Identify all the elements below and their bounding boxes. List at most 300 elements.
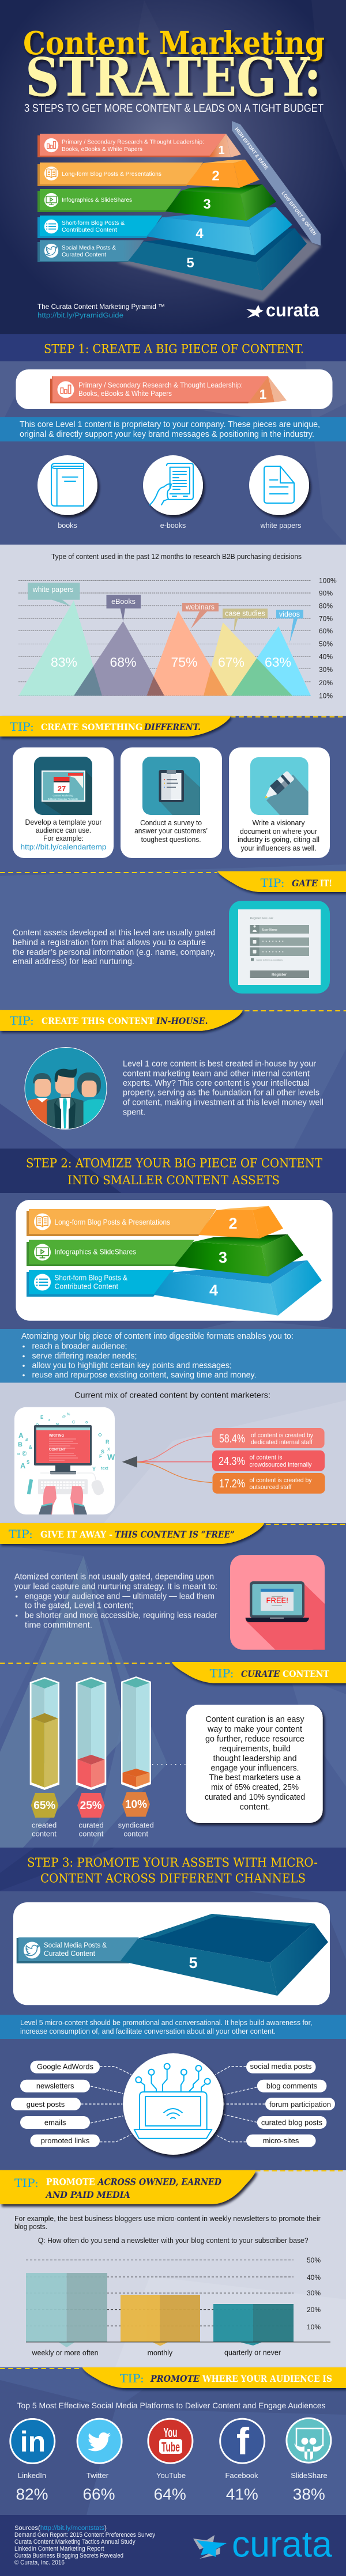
stat: outsourced: of content is created by	[249, 1477, 312, 1484]
icon: registration form tablet: User Name	[262, 928, 277, 932]
bar: created content 65%: content	[32, 1830, 57, 1838]
pyramid caption: http://bit.ly/PyramidGuide	[37, 312, 123, 319]
level 2 bar	[37, 163, 203, 186]
tip: gate it: IT!	[320, 878, 332, 889]
axis labels: 20%	[319, 679, 333, 687]
pyramid level 2: 2	[212, 168, 220, 184]
sources	[14, 2525, 155, 2566]
icon: e-books: e-books	[160, 522, 186, 530]
tip: gate it: TIP:	[261, 876, 285, 890]
level 5 card	[13, 1902, 330, 2005]
level 1 card: 1	[260, 387, 267, 402]
step 1 heading	[0, 334, 346, 361]
card: visionary document: industry is going, citing all	[238, 835, 319, 844]
level 5 description strip: Level 5 micro-content should be promotional and conversational. It helps build awareness for,	[20, 2018, 313, 2027]
tip: give it away: GIVE IT AWAY -	[40, 1529, 112, 1540]
level 1 card: Primary / Secondary Research & Thought Leadership:	[78, 382, 243, 390]
callout: ebooks: eBooks	[111, 598, 136, 606]
tip: promote where audience is	[0, 2367, 346, 2388]
pyramid level 1: 1	[218, 144, 225, 157]
callout: white papers	[28, 583, 80, 606]
callout: videos: videos	[279, 610, 300, 618]
level 1 description strip: This core Level 1 content is proprietary to your company. These pieces are unique,	[20, 420, 320, 429]
level 5 description strip	[0, 2015, 346, 2039]
tip: curate content: CONTENT	[283, 1668, 329, 1679]
tip: owned earned paid: ACROSS OWNED, EARNED	[97, 2177, 221, 2188]
percentages: 67%	[218, 655, 245, 670]
sources: Curata Business Blogging Secrets Revealed	[14, 2552, 123, 2559]
icon: clipboard	[142, 757, 200, 815]
tip: give it away: THIS CONTENT IS “FREE”	[115, 1529, 235, 1540]
axis labels: 50%	[319, 640, 333, 648]
illustration: writing on computer: N	[56, 1423, 59, 1427]
channel pills: forum participation	[269, 2100, 331, 2109]
channel pills: promoted links	[41, 2136, 90, 2145]
channel pills: blog comments	[266, 2082, 318, 2090]
bar: syndicated content 10%: content	[123, 1830, 148, 1838]
callout: case studies	[223, 609, 268, 632]
percentages	[51, 655, 291, 670]
illustration: writing on computer: C	[72, 1421, 75, 1425]
category labels: monthly	[148, 2348, 173, 2357]
callout: white papers: white papers	[32, 586, 73, 594]
gate description: the reader’s personal information (e.g. name, company,	[13, 948, 216, 957]
newsletter bar chart: 10%	[307, 2323, 321, 2331]
atomized content description: Atomized content is not usually gated, depending upon	[14, 1573, 214, 1582]
icon: calendar template: Editorial Calendar Template	[48, 798, 78, 800]
card: template: Develop a template your	[25, 818, 102, 826]
promotion panel	[0, 2170, 346, 2367]
facebook: f	[236, 2420, 250, 2462]
tip: curate content: TIP:	[210, 1667, 234, 1680]
callout: webinars: webinars	[185, 603, 215, 611]
stat: crowdsourced	[212, 1451, 325, 1471]
newsletter bar chart: 50%	[307, 2256, 321, 2264]
atomized content description: your lead capture and nurturing strategy. It is meant to:	[14, 1582, 217, 1592]
in-house description: of content, making investment at this level money well	[123, 1098, 324, 1108]
illustration: writing on computer: A	[18, 1431, 24, 1440]
sources: (http://bit.ly/mcontstats )	[38, 2525, 107, 2532]
icon: white papers: white papers	[260, 522, 301, 530]
card: template: audience can use.	[36, 826, 91, 834]
curation explanation card: engage your influencers.	[211, 1764, 299, 1773]
atomized content description	[14, 1573, 217, 1630]
youtube	[148, 2419, 193, 2503]
level 5 bar: Curated Content	[44, 1950, 96, 1958]
curata logo blue: curata	[232, 2524, 332, 2565]
gate description: behind a registration form that allows you to capture	[13, 938, 206, 947]
tip: curate content: CURATE	[241, 1668, 280, 1679]
pyramid level 3: 3	[203, 197, 211, 212]
illustration: writing on computer: ©	[22, 1451, 27, 1457]
example text	[14, 2214, 321, 2245]
level 5 bar: Social Media Posts &	[62, 244, 116, 251]
axis labels: 80%	[319, 602, 333, 610]
level 1 bar	[37, 134, 226, 157]
curation explanation card: mix of 65% created, 25%	[211, 1783, 299, 1792]
bar: weekly	[26, 2273, 107, 2347]
tip: gate it	[0, 871, 346, 892]
illustration: writing on computer: Y	[92, 1466, 96, 1472]
bar: quarterly	[213, 2304, 294, 2345]
pyramid level 4: 4	[195, 226, 204, 241]
level 1 card	[16, 369, 332, 409]
channel pills: Google AdWords	[37, 2063, 94, 2071]
slideshare: 38%	[293, 2485, 325, 2503]
sources: LinkedIn Content Marketing Report	[14, 2545, 104, 2552]
bar: monthly	[121, 2295, 200, 2346]
arrow: connectors to mix	[122, 1436, 212, 1483]
icon: e-books	[143, 455, 203, 530]
level 5 bar: Social Media Posts &	[44, 1941, 107, 1949]
pyramid level 4	[153, 1260, 322, 1316]
curata logo white: curata	[266, 300, 319, 320]
illustration: writing on computer: R	[106, 1439, 110, 1445]
youtube: Tube	[161, 2439, 180, 2454]
illustration: writing on computer: S	[101, 1449, 104, 1455]
axis labels: 70%	[319, 614, 333, 622]
pyramid level 4: 4	[209, 1282, 218, 1299]
tip: owned earned paid	[0, 2170, 346, 2204]
level 4 bar: Short-form Blog Posts &	[62, 220, 125, 226]
bar: created content 65%: 65%	[33, 1800, 55, 1812]
newsletter bar chart: 20%	[307, 2306, 321, 2314]
effort side band	[232, 121, 321, 245]
example text: blog posts.	[14, 2222, 47, 2231]
illustration: writing on computer	[14, 1407, 115, 1514]
channels diagram	[11, 2053, 335, 2155]
facebook	[220, 2419, 265, 2503]
illustration: team	[25, 1048, 107, 1130]
illustration: writing on computer: W	[107, 1452, 115, 1461]
category labels	[32, 2348, 281, 2357]
axis labels	[319, 576, 337, 700]
pyramid level 5: 5	[189, 1954, 198, 1971]
card: survey	[121, 747, 222, 858]
grid lines	[18, 580, 311, 696]
illustration: writing on computer: #	[25, 1437, 28, 1442]
callout: videos	[276, 610, 303, 643]
percentages: 68%	[110, 655, 137, 670]
tip: create something different	[0, 716, 346, 736]
illustration: writing on computer: &	[29, 1445, 32, 1450]
axis labels: 40%	[319, 652, 333, 660]
tip: owned earned paid: AND PAID MEDIA	[45, 2189, 130, 2200]
illustration: writing on computer: o	[85, 1421, 88, 1425]
linkedin: 82%	[16, 2485, 48, 2503]
stat: crowdsourced: crowdsourced internally	[249, 1461, 312, 1468]
bar: curated content 25%: 25%	[80, 1800, 102, 1812]
level 2 bar	[27, 1209, 216, 1236]
pyramid level 3: 3	[219, 1249, 227, 1266]
pyramid level 5	[128, 228, 307, 290]
tip: create in-house: TIP:	[10, 1014, 34, 1028]
level 5 description strip: increase consumption of, and facilitate conversation about all your other content.	[20, 2027, 276, 2035]
icon: registration form tablet: Register new user	[250, 917, 273, 920]
curation explanation card: go further, reduce resource	[205, 1735, 304, 1744]
atomizing benefits strip: allow you to highlight certain key points and messages;	[32, 1361, 232, 1370]
category labels: weekly or more often	[32, 2348, 99, 2357]
gate description	[13, 928, 216, 966]
facebook: Facebook	[225, 2471, 258, 2480]
example text: For example, the best business bloggers use micro-content in weekly newsletters to promote their	[14, 2214, 321, 2223]
title	[23, 24, 325, 115]
content marketing pyramid	[37, 121, 321, 302]
pyramid level 3	[174, 1234, 303, 1276]
curation explanation card: requirements, build	[219, 1744, 291, 1754]
step 2 heading	[0, 1149, 346, 1193]
percentages: 63%	[265, 655, 291, 670]
icon: free laptop: FREE!	[266, 1596, 288, 1605]
icon: registration form tablet: Register	[272, 973, 287, 977]
step 3 heading	[0, 1848, 346, 1891]
card: survey: Conduct a survey to	[140, 818, 202, 827]
chart title: Type of content used in the past 12 months to research B2B purchasing decisions	[51, 553, 302, 561]
percentages: 75%	[171, 655, 198, 670]
pyramid ground shadow	[117, 231, 321, 302]
in-house description: property, serving as the foundation for all other levels	[123, 1089, 319, 1098]
slideshare: SlideShare	[291, 2471, 328, 2480]
atomizing benefits strip	[0, 1329, 346, 1383]
tip: create something different: TIP:	[10, 720, 34, 734]
effort side band: HIGH EFFORT & RARE	[234, 126, 269, 171]
level 1 description strip	[0, 417, 346, 441]
illustration: writing on computer: A	[20, 1461, 26, 1470]
axis labels: 100%	[319, 576, 337, 584]
pyramid level 2	[198, 1206, 283, 1238]
tip: create something different: CREATE SOMETHING	[41, 722, 142, 732]
atomized content description: be shorter and more accessible, requiring less reader	[25, 1611, 217, 1621]
level 3 bar	[27, 1240, 194, 1266]
level 5 bar	[37, 240, 144, 262]
twitter: 66%	[82, 2485, 115, 2503]
icon: white papers	[249, 455, 309, 530]
channel pills: curated blog posts	[261, 2118, 323, 2127]
illustration: writing on computer: @	[62, 1415, 66, 1419]
illustration: writing on computer: F	[99, 1454, 102, 1459]
example text: Q: How often do you send a newsletter with your blog content to your subscriber base?	[38, 2236, 309, 2245]
step 1 heading: STEP 1: CREATE A BIG PIECE OF CONTENT.	[44, 342, 304, 356]
pyramid level 4	[146, 207, 292, 255]
card: visionary document: Write a visionary	[253, 818, 305, 827]
step 2 heading: INTO SMALLER CONTENT ASSETS	[67, 1173, 280, 1187]
icon: pen	[250, 757, 309, 815]
youtube: You	[163, 2425, 177, 2440]
tip: give it away	[0, 1523, 346, 1544]
in-house description: content marketing team and other internal content	[123, 1070, 310, 1079]
level 1 description strip: original & directly support your key brand messages & positioning in the industry.	[20, 429, 314, 439]
illustration: writing on computer: ◇	[97, 1431, 103, 1437]
atomized levels card	[16, 1200, 332, 1321]
effort side band: LOW EFFORT & OFTEN	[280, 190, 318, 236]
linkedin: LinkedIn	[18, 2471, 46, 2480]
newsletter bar chart: 40%	[307, 2273, 321, 2282]
icon: free laptop	[230, 1555, 325, 1650]
newsletter bar chart: 30%	[307, 2289, 321, 2297]
channel pills: newsletters	[36, 2082, 74, 2090]
curation explanation card: The best marketers use a	[209, 1773, 301, 1782]
tip: owned earned paid: PROMOTE	[46, 2177, 95, 2188]
atomizing benefits strip: reach a broader audience;	[32, 1342, 127, 1351]
stat: dedicated staff: 58.4%	[219, 1433, 245, 1445]
level 4 bar	[27, 1270, 174, 1297]
card: template	[13, 747, 114, 858]
tip: create in-house	[0, 1010, 346, 1031]
linkedin	[10, 2419, 55, 2503]
pyramid caption: The Curata Content Marketing Pyramid ™	[37, 304, 165, 311]
tip: owned earned paid: TIP:	[14, 2176, 39, 2190]
channel pills: guest posts	[27, 2100, 65, 2109]
social platforms	[10, 2401, 331, 2503]
icon: books	[37, 455, 97, 530]
stat: dedicated staff: of content is created by	[251, 1432, 313, 1439]
atomizing benefits strip: Atomizing your big piece of content into digestible formats enables you to:	[21, 1332, 294, 1341]
channel pills: micro-sites	[263, 2136, 299, 2145]
axis labels: 90%	[319, 589, 333, 597]
in-house description: Level 1 core content is best created in-house by your	[123, 1060, 316, 1069]
axis labels: 10%	[319, 692, 333, 700]
created content mix panel	[0, 1383, 346, 1523]
card: survey: answer your customers’	[134, 826, 208, 835]
illustration: writing on computer: S	[27, 1460, 30, 1465]
channel pills	[11, 2061, 335, 2147]
pyramid level 2: 2	[228, 1215, 238, 1232]
level 4 bar: Contributed Content	[62, 226, 117, 233]
card: template: For example:	[43, 834, 84, 843]
bar: curated content 25%: curated	[78, 1821, 104, 1830]
tip: create something different: DIFFERENT.	[144, 722, 201, 732]
bar: syndicated content 10%	[118, 1676, 154, 1838]
level 4 bar: Contributed Content	[54, 1283, 119, 1291]
illustration: writing on computer: o	[17, 1452, 20, 1456]
illustration: writing on computer: %	[67, 1413, 70, 1417]
sources: © Curata, Inc. 2016	[14, 2559, 65, 2566]
icon: connected laptop	[123, 2053, 224, 2155]
bar: created content 65%: created	[32, 1821, 57, 1830]
tip: gate it: GATE	[292, 878, 318, 889]
atomizing benefits strip: serve differing reader needs;	[32, 1352, 137, 1361]
level 4 bar	[37, 216, 162, 238]
stat: crowdsourced: 24.3%	[219, 1455, 245, 1468]
bar: created content 65%	[30, 1677, 59, 1838]
level 2 bar: Long-form Blog Posts & Presentations	[54, 1218, 170, 1226]
card: visionary document: your influencers as well.	[241, 844, 316, 852]
gate description: email address) for lead nurturing.	[13, 957, 134, 966]
card: visionary document: document on where your	[240, 827, 318, 836]
sources: Sources:	[14, 2525, 40, 2532]
level 1 card: Books, eBooks & White Papers	[78, 390, 172, 398]
icon: registration form tablet	[229, 901, 330, 994]
illustration: writing on computer: text	[101, 1467, 108, 1471]
callout: case studies: case studies	[225, 610, 265, 618]
bar: curated content 25%: content	[79, 1830, 104, 1838]
callout: ebooks	[106, 595, 141, 621]
atomized content description: time commitment.	[25, 1621, 92, 1630]
step 2 heading: STEP 2: ATOMIZE YOUR BIG PIECE OF CONTENT	[26, 1157, 322, 1170]
twitter	[77, 2419, 122, 2503]
pyramid level 3	[166, 184, 276, 221]
icon: registration form tablet: *******	[262, 951, 285, 955]
pyramid level 1	[209, 134, 241, 157]
tip: promote where audience is: PROMOTE	[150, 2373, 200, 2384]
icon: calendar template: Content Marketing	[52, 794, 73, 797]
in-house description: spent.	[123, 1108, 145, 1117]
curation explanation card: way to make your content	[207, 1725, 302, 1734]
twitter: Twitter	[86, 2471, 109, 2480]
sources: Curata Content Marketing Tactics Annual Study	[14, 2539, 136, 2545]
youtube: YouTube	[156, 2471, 186, 2480]
card: visionary document	[229, 747, 330, 858]
stat: dedicated staff	[212, 1428, 325, 1448]
tip: create in-house: IN-HOUSE.	[156, 1015, 208, 1026]
in-house description: experts. Why? This core content is your intellectual	[123, 1079, 310, 1088]
callout: webinars	[182, 603, 219, 629]
curation explanation card	[152, 1705, 323, 1823]
level 3 bar: Infographics & SlideShares	[54, 1248, 136, 1256]
level 5 bar: Curated Content	[62, 251, 106, 258]
step 3 heading: CONTENT ACROSS DIFFERENT CHANNELS	[40, 1872, 306, 1886]
triangles	[18, 600, 311, 696]
pyramid level 2	[186, 160, 260, 188]
tip: create in-house: CREATE THIS CONTENT	[42, 1015, 154, 1026]
pyramid caption	[37, 304, 165, 319]
atomized content description: to the gated, Level 1 content;	[25, 1601, 134, 1611]
tip: promote where audience is: WHERE YOUR AUDIENCE IS	[202, 2373, 332, 2384]
step 3 heading: STEP 3: PROMOTE YOUR ASSETS WITH MICRO-	[27, 1856, 318, 1869]
connectors	[81, 2067, 265, 2142]
chart panel: content types	[0, 545, 346, 716]
icon: books: books	[58, 522, 77, 530]
channel pills: emails	[44, 2118, 66, 2127]
sources: Demand Gen Report: 2015 Content Preferences Survey	[14, 2532, 155, 2539]
axis labels: 60%	[319, 627, 333, 635]
icon: registration form tablet: I agree to Terms & Conditions	[256, 959, 283, 961]
illustration: writing on computer: B	[18, 1441, 22, 1448]
panel title: Current mix of created content by content marketers:	[74, 1391, 270, 1400]
stat: outsourced: 17.2%	[219, 1478, 245, 1490]
tip: curate content	[0, 1662, 346, 1683]
channel pills: social media posts	[250, 2062, 312, 2071]
tip: promote where audience is: TIP:	[120, 2371, 144, 2385]
pyramid level 5: 5	[186, 255, 194, 271]
icon: registration form tablet: *******	[262, 940, 285, 945]
gate description: Content assets developed at this level are usually gated	[13, 928, 215, 938]
level 1 bar: Books, eBooks & White Papers	[62, 146, 142, 153]
illustration: writing on computer: Q	[36, 1423, 39, 1427]
bar: syndicated content 10%: syndicated	[118, 1821, 154, 1830]
section title: Top 5 Most Effective Social Media Platforms to Deliver Content and Engage Audiences	[17, 2401, 325, 2410]
level 3 bar	[37, 189, 181, 212]
facebook: 41%	[226, 2485, 258, 2503]
stat: dedicated staff: dedicated internal staff	[251, 1439, 313, 1446]
card: template: http://bit.ly/calendartemp	[21, 843, 106, 851]
bar: syndicated content 10%: 10%	[125, 1799, 147, 1811]
atomizing benefits strip: reuse and repurpose existing content, saving time and money.	[32, 1371, 256, 1380]
card: survey: toughest questions.	[141, 835, 201, 844]
curation explanation card: Content curation is an easy	[205, 1715, 304, 1724]
icon: calendar template: 27	[58, 784, 66, 793]
stat: outsourced: outsourced staff	[249, 1484, 292, 1491]
curation explanation card: thought leadership and	[213, 1754, 296, 1763]
illustration: writing on computer: E	[40, 1415, 44, 1420]
category labels: quarterly or never	[224, 2348, 281, 2357]
illustration: writing on computer: ε	[48, 1418, 51, 1422]
curation explanation card: content.	[240, 1803, 270, 1812]
level 5 bar	[17, 1937, 139, 1963]
level 3 bar: Infographics & SlideShares	[62, 197, 132, 203]
linkedin: in	[20, 2426, 46, 2458]
curation explanation card: curated and 10% syndicated	[205, 1793, 305, 1802]
